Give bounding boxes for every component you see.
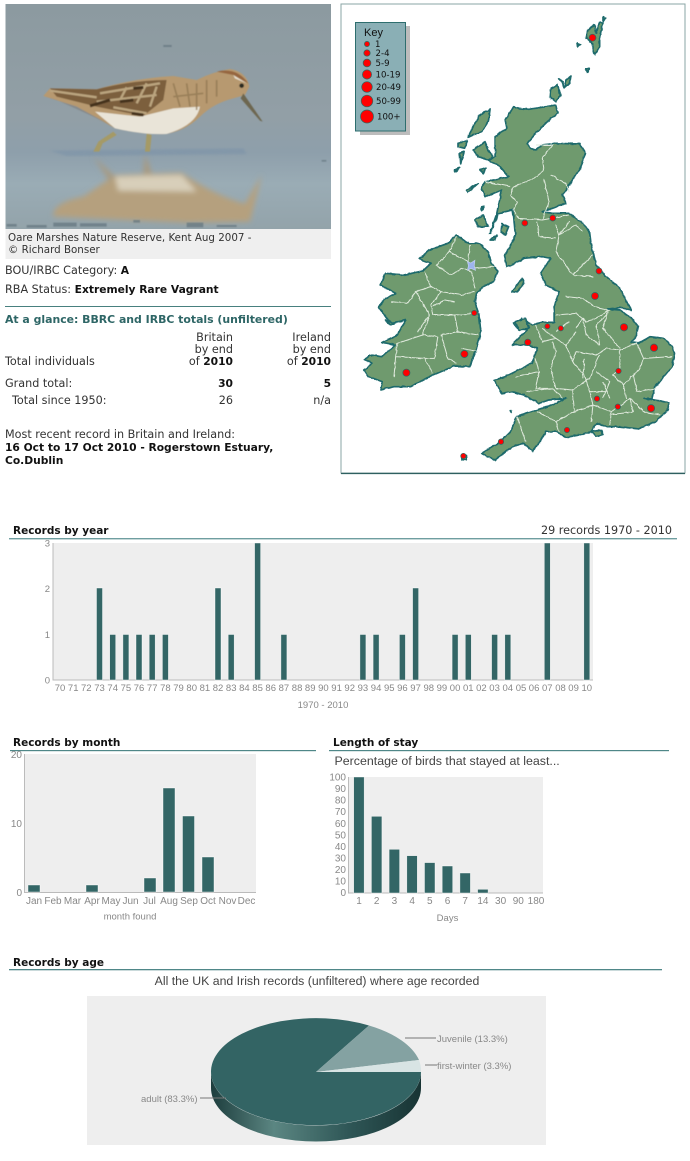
heading: at a glance: At a glance: BBRC and IRBC totals (unfiltered) [5, 313, 288, 326]
chart: bars by days stayed: 10 [335, 877, 346, 888]
chart: bars by year: 87 [279, 683, 289, 694]
panel: distribution map [341, 4, 685, 474]
chart: bars by days stayed: 30 [335, 854, 346, 864]
chart: bars by days stayed: 180 [528, 896, 545, 907]
heading: records by month: Records by month [13, 737, 120, 749]
chart: bars by year: 92 [344, 683, 355, 694]
table: totals: 26 [219, 394, 233, 407]
chart: bars by year: 09 [568, 683, 579, 694]
chart: bars by year: 96 [397, 683, 408, 694]
chart: bars by year: 98 [424, 683, 434, 694]
map: county borders [391, 145, 672, 442]
table: totals: 5 [324, 377, 331, 390]
chart: bars by month: month found [104, 912, 156, 922]
chart: bars by year: 73 [94, 683, 105, 694]
legend: key: 50-99 [376, 97, 401, 107]
chart: bars by year: 71 [68, 683, 78, 694]
chart: bars by days stayed: Days [437, 913, 459, 924]
chart: bars by days stayed: 50 [335, 830, 346, 841]
table: totals: Britain [196, 331, 233, 344]
photo caption: Oare Marshes Nature Reserve, Kent Aug 2007 - [8, 232, 252, 244]
chart: bars by days stayed: 40 [335, 842, 346, 853]
chart: bars by days stayed: 80 [335, 796, 346, 807]
legend: key: Key [364, 27, 383, 39]
chart: bars by year: 1 [45, 630, 50, 641]
heading: length of stay: Length of stay [333, 737, 418, 749]
chart: bars by days stayed: 30 [495, 896, 507, 907]
chart: bars by year: 02 [476, 683, 487, 694]
chart: bars by days stayed [329, 772, 545, 924]
chart: bars by year: 95 [384, 683, 395, 694]
chart: bars by year: 10 [582, 683, 592, 694]
chart: bars by year: 90 [318, 683, 329, 694]
table: totals: of 2010 [189, 355, 233, 368]
chart: bars by year [45, 538, 593, 711]
chart: age pie [87, 996, 546, 1145]
panel: bird photograph [6, 4, 331, 229]
chart: bars by days stayed: 7 [462, 896, 468, 907]
table: totals: of 2010 [287, 355, 331, 368]
panel: records by year [9, 524, 677, 711]
chart: bars by year: 79 [173, 683, 184, 694]
chart: bars by year: 3 [45, 538, 50, 550]
panel: records by month [10, 737, 316, 922]
chart: bars by year: 81 [200, 683, 210, 694]
subtitle: percentage of birds: Percentage of birds that stayed at least... [334, 754, 560, 768]
chart: bars by year: 70 [55, 683, 65, 694]
chart: bars by year: 01 [463, 683, 474, 694]
chart: bars by year: 88 [292, 683, 302, 694]
chart: bars by month: 0 [16, 888, 22, 899]
chart: bars by year: 07 [542, 683, 553, 694]
text block: category and status: RBA Status: Extremely Rare Vagrant [5, 283, 219, 296]
chart: bars by year: 75 [121, 683, 131, 694]
chart: bars by year: 89 [305, 683, 315, 694]
legend: key: 5-9 [376, 59, 390, 69]
chart: bars by days stayed: 100 [329, 772, 346, 784]
panel: at a glance totals [4, 306, 331, 407]
chart: bars by days stayed: 6 [445, 896, 451, 907]
chart: bars by year: 85 [252, 683, 263, 694]
chart: bars by month: Feb [44, 896, 62, 907]
map: Scottish islands [455, 17, 605, 235]
chart: bars by days stayed: 3 [392, 896, 398, 907]
map: Great Britain and Ireland [364, 105, 675, 460]
chart: age pie: first-winter (3.3%) [437, 1061, 511, 1072]
chart: bars by days stayed: 90 [335, 784, 346, 795]
table: totals: 30 [218, 377, 233, 390]
subtitle: age records note: All the UK and Irish records (unfiltered) where age recorded [155, 974, 479, 988]
table: totals [4, 331, 331, 407]
chart: bars by year: 76 [134, 683, 144, 694]
chart: bars by month: Apr [84, 896, 100, 907]
chart: bars by year: 84 [239, 683, 250, 694]
legend: key: 1 [375, 40, 380, 50]
text block: most recent record: 16 Oct to 17 Oct 2010 - Rogerstown Estuary, [5, 441, 273, 454]
chart: bars by year: 82 [213, 683, 223, 694]
chart: bars by year: 99 [437, 683, 447, 694]
chart: bars by days stayed: 5 [427, 896, 433, 907]
chart: bars by year: 1970 - 2010 [298, 700, 348, 711]
chart: bars by year: 04 [503, 683, 513, 694]
chart: bars by month [11, 750, 256, 922]
table: totals: by end [293, 343, 331, 356]
text block: category and status: BOU/IRBC Category: A [5, 264, 130, 277]
chart: bars by year: 91 [331, 683, 342, 694]
chart: bars by year: 97 [410, 683, 421, 694]
photo: shoreline debris [7, 45, 326, 228]
photo caption [6, 229, 331, 259]
legend: key: 20-49 [376, 83, 401, 93]
photo caption: © Richard Bonser [8, 244, 101, 256]
map: record dots [403, 34, 658, 459]
chart: bars by month: Oct [200, 896, 216, 907]
chart: bars by year: 93 [358, 683, 368, 694]
text block: most recent record: Co.Dublin [5, 454, 63, 467]
chart: bars by year: 77 [147, 683, 157, 694]
chart: bars by month: Mar [64, 896, 82, 907]
legend: key [356, 22, 410, 135]
chart: bars by days stayed: 14 [477, 896, 489, 907]
chart: bars by year: 00 [450, 683, 460, 694]
chart: bars by days stayed: 20 [335, 865, 346, 876]
chart: bars by year: 72 [81, 683, 92, 694]
chart: bars by year: 94 [371, 683, 381, 694]
heading: records by year: Records by year [13, 525, 109, 537]
legend: key: 100+ [377, 112, 401, 122]
map: Lough Neagh marker [467, 260, 476, 270]
chart: bars by year: 08 [555, 683, 566, 694]
chart: bars by month: Dec [238, 896, 255, 907]
chart: bars by year: 74 [107, 683, 118, 694]
chart: bars by year: 03 [489, 683, 500, 694]
chart: bars by month: 10 [11, 819, 22, 830]
chart: age pie: adult (83.3%) [141, 1094, 198, 1105]
photo: waterline [50, 148, 247, 156]
chart: bars by days stayed: 2 [374, 896, 380, 907]
chart: age pie: Juvenile (13.3%) [437, 1034, 508, 1045]
chart: bars by days stayed: 60 [335, 819, 346, 830]
panel: length of stay [329, 737, 669, 924]
chart: bars by days stayed: 4 [409, 896, 415, 907]
note: record count: 29 records 1970 - 2010 [541, 524, 672, 537]
chart: bars by month: Sep [180, 896, 198, 907]
table: totals: Total individuals [4, 355, 95, 368]
legend: key: 2-4 [376, 49, 390, 59]
text block: category and status [5, 264, 219, 296]
text block: most recent record [5, 428, 273, 467]
table: totals: Total since 1950: [11, 394, 107, 407]
chart: bars by year: 83 [226, 683, 236, 694]
chart: bars by month: Jul [143, 896, 156, 907]
chart: bars by month: Nov [219, 896, 236, 907]
table: totals: n/a [313, 394, 331, 407]
chart: bars by year: 06 [529, 683, 539, 694]
chart: bars by month: Aug [160, 896, 178, 907]
photo: reflection in water [53, 153, 262, 223]
table: totals: by end [195, 343, 233, 356]
chart: bars by year: 86 [265, 683, 276, 694]
table: totals: Ireland [292, 331, 331, 344]
table: totals: Grand total: [5, 377, 72, 390]
chart: bars by month: May [102, 896, 120, 907]
chart: bars by year: 2 [45, 584, 50, 595]
chart: bars by year: 0 [45, 676, 50, 686]
chart: bars by days stayed: 1 [356, 896, 362, 907]
chart: bars by month: Jan [26, 896, 42, 907]
heading: records by age: Records by age [13, 957, 104, 969]
chart: bars by year: 05 [516, 683, 526, 694]
panel: records by age [9, 957, 662, 1145]
chart: bars by year: 80 [186, 683, 197, 694]
chart: bars by year: 78 [160, 683, 171, 694]
photo: bird [43, 69, 263, 152]
chart: bars by month: 20 [11, 750, 22, 761]
chart: bars by days stayed: 0 [340, 888, 346, 899]
text block: most recent record: Most recent record in Britain and Ireland: [5, 428, 235, 441]
chart: bars by days stayed: 90 [513, 896, 524, 907]
chart: bars by month: Jun [122, 896, 139, 907]
chart: bars by days stayed: 70 [335, 807, 346, 818]
legend: key: 10-19 [376, 70, 400, 80]
